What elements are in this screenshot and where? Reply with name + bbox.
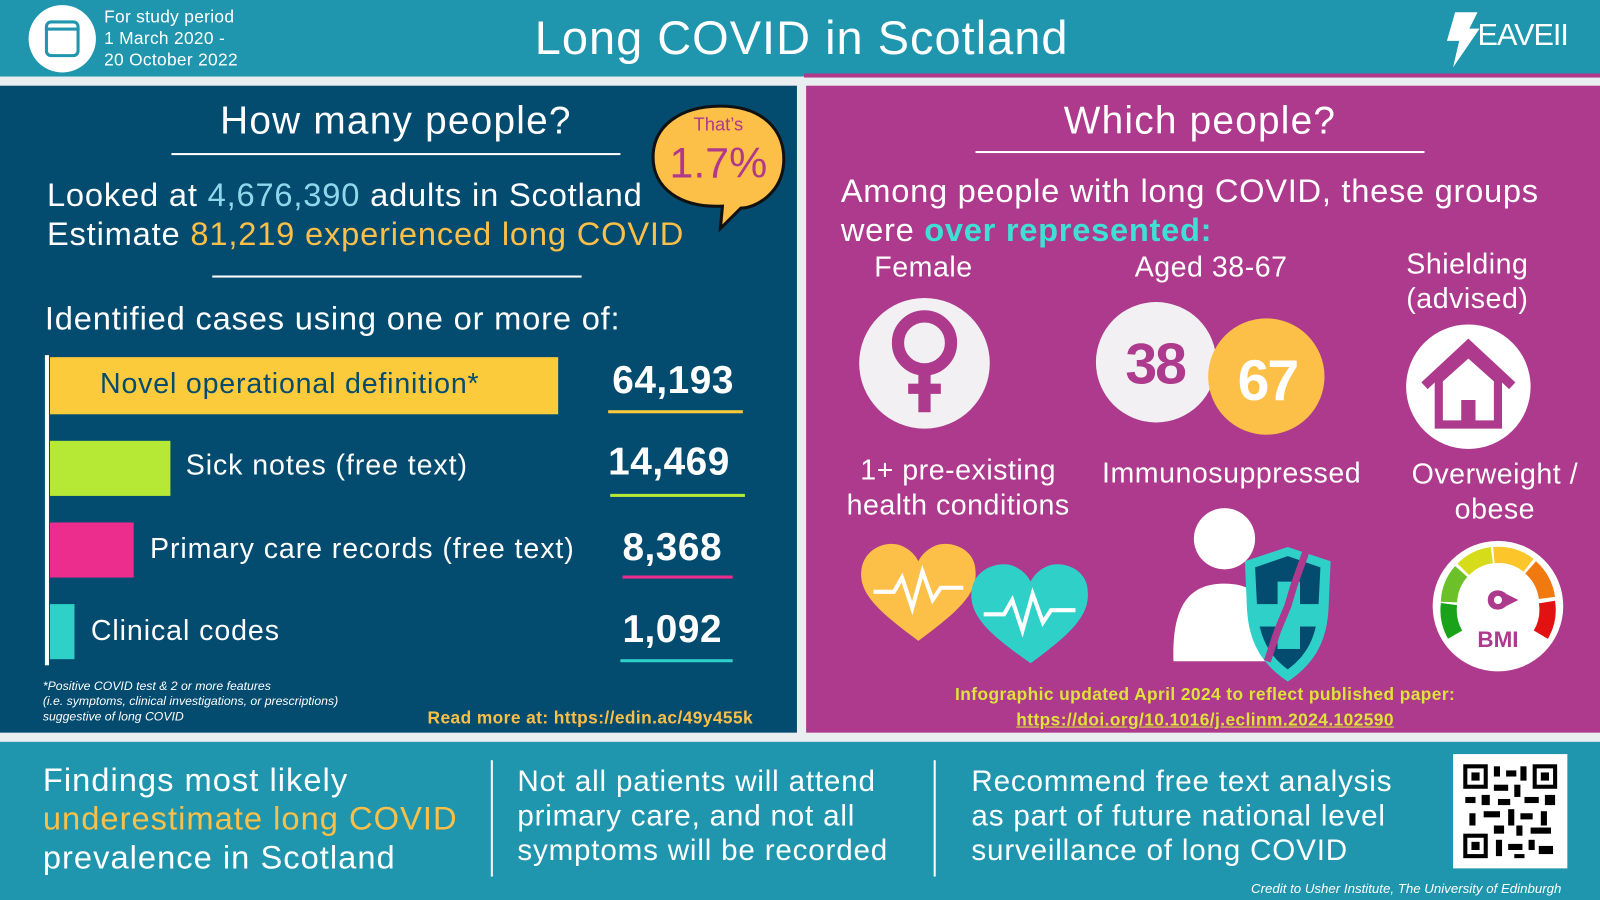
- text: over represented: were over represented:: [841, 211, 1212, 248]
- study period text: For study period: [104, 7, 234, 27]
- bottom bar: [0, 742, 1600, 900]
- bar chart: Sick notes (free text): [186, 449, 468, 481]
- text: underestimate: Findings most likely: [43, 761, 348, 798]
- update note: Infographic updated April 2024 to reflect published paper:: [955, 685, 1455, 704]
- footnote: [42, 679, 338, 723]
- bar: clinical codes: [50, 604, 74, 659]
- read more link: Read more at: https://edin.ac/49y455k: [428, 708, 753, 728]
- group: female: Female: [874, 251, 973, 283]
- text: over represented: [840, 172, 1539, 248]
- text: recommend: surveillance of long COVID: [971, 835, 1348, 867]
- group: shielding: [1406, 248, 1531, 449]
- footnote: *Positive COVID test & 2 or more features: [43, 679, 271, 693]
- group: aged 38-67: [1096, 251, 1324, 435]
- text: over represented: Among people with long COVID, these groups: [841, 172, 1539, 209]
- bar: novel operational definition: [50, 357, 558, 414]
- text: underestimate: prevalence in Scotland: [43, 839, 396, 876]
- text: not all patients: primary care, and not all: [517, 800, 855, 833]
- group: shielding: Shielding: [1406, 248, 1528, 280]
- group: aged 38-67: 67: [1238, 348, 1297, 412]
- update note: [955, 685, 1455, 730]
- group: aged 38-67: Aged 38-67: [1135, 251, 1288, 283]
- heading: How many people?: [220, 100, 572, 143]
- footnote: (i.e. symptoms, clinical investigations, or prescriptions): [43, 694, 338, 708]
- logo: EAVE II: [1447, 12, 1568, 68]
- panel: how many people: [0, 86, 797, 733]
- logo: EAVE II: EAVEII: [1478, 18, 1568, 52]
- bar chart: 1,092: [622, 608, 722, 651]
- panel: which people: [806, 86, 1600, 733]
- bar: primary care records: [50, 522, 134, 578]
- text: not all patients: symptoms will be recorded: [517, 835, 888, 867]
- group: female: [859, 251, 990, 429]
- bar chart: 14,469: [608, 441, 730, 484]
- bar chart: [44, 355, 745, 666]
- title: Long COVID in Scotland: [535, 11, 1069, 64]
- header bar: [0, 0, 1600, 77]
- heading: Which people?: [1064, 100, 1336, 143]
- icon: calendar: [29, 5, 96, 72]
- text: underestimate: [43, 761, 458, 876]
- bar chart: Clinical codes: [91, 614, 280, 646]
- text: adults looked at: [47, 177, 684, 252]
- group: shielding: (advised): [1406, 283, 1528, 314]
- callout: 1.7% speech bubble: 1.7%: [670, 139, 767, 187]
- group: overweight / obese: [1412, 458, 1578, 672]
- group: aged 38-67: 38: [1125, 332, 1185, 396]
- text: underestimate: underestimate long COVID: [43, 800, 458, 837]
- group: pre-existing conditions: 1+ pre-existing: [860, 454, 1056, 486]
- group: overweight / obese: Overweight /: [1412, 458, 1578, 490]
- bar: sick notes: [50, 441, 170, 496]
- bar chart: 64,193: [612, 359, 734, 402]
- footnote: suggestive of long COVID: [43, 709, 184, 723]
- study period text: [104, 7, 238, 69]
- magenta stripe: [804, 73, 1600, 78]
- callout: 1.7% speech bubble: That’s: [694, 114, 743, 135]
- bar chart: Primary care records (free text): [150, 533, 575, 564]
- update note: https://doi.org/10.1016/j.eclinm.2024.102590: [1016, 710, 1394, 730]
- study period text: 20 October 2022: [104, 50, 238, 69]
- group: overweight / obese: obese: [1455, 493, 1535, 524]
- text: recommend: [971, 765, 1392, 867]
- text: recommend: Recommend free text analysis: [971, 765, 1392, 798]
- group: pre-existing conditions: [847, 454, 1088, 664]
- group: pre-existing conditions: health conditions: [847, 489, 1070, 520]
- text: identified cases: Identified cases using one or more of:: [45, 300, 620, 337]
- text: adults looked at: Estimate 81,219 experienced long COVID: [47, 215, 684, 252]
- QR code: [1453, 754, 1567, 868]
- group: immunosuppressed: Immunosuppressed: [1102, 457, 1361, 489]
- bar chart: 8,368: [622, 527, 722, 569]
- credit: Credit to Usher Institute, The University of Edinburgh: [1251, 881, 1561, 896]
- group: immunosuppressed: [1102, 457, 1361, 682]
- study period text: 1 March 2020 -: [104, 29, 225, 48]
- group: overweight / obese: BMI: [1477, 627, 1519, 652]
- text: not all patients: [517, 765, 888, 867]
- text: adults looked at: Looked at 4,676,390 adults in Scotland: [47, 177, 643, 213]
- text: not all patients: Not all patients will attend: [517, 765, 876, 798]
- callout: 1.7% speech bubble: [652, 104, 786, 232]
- bar chart: Novel operational definition*: [100, 367, 479, 399]
- text: recommend: as part of future national level: [971, 800, 1386, 833]
